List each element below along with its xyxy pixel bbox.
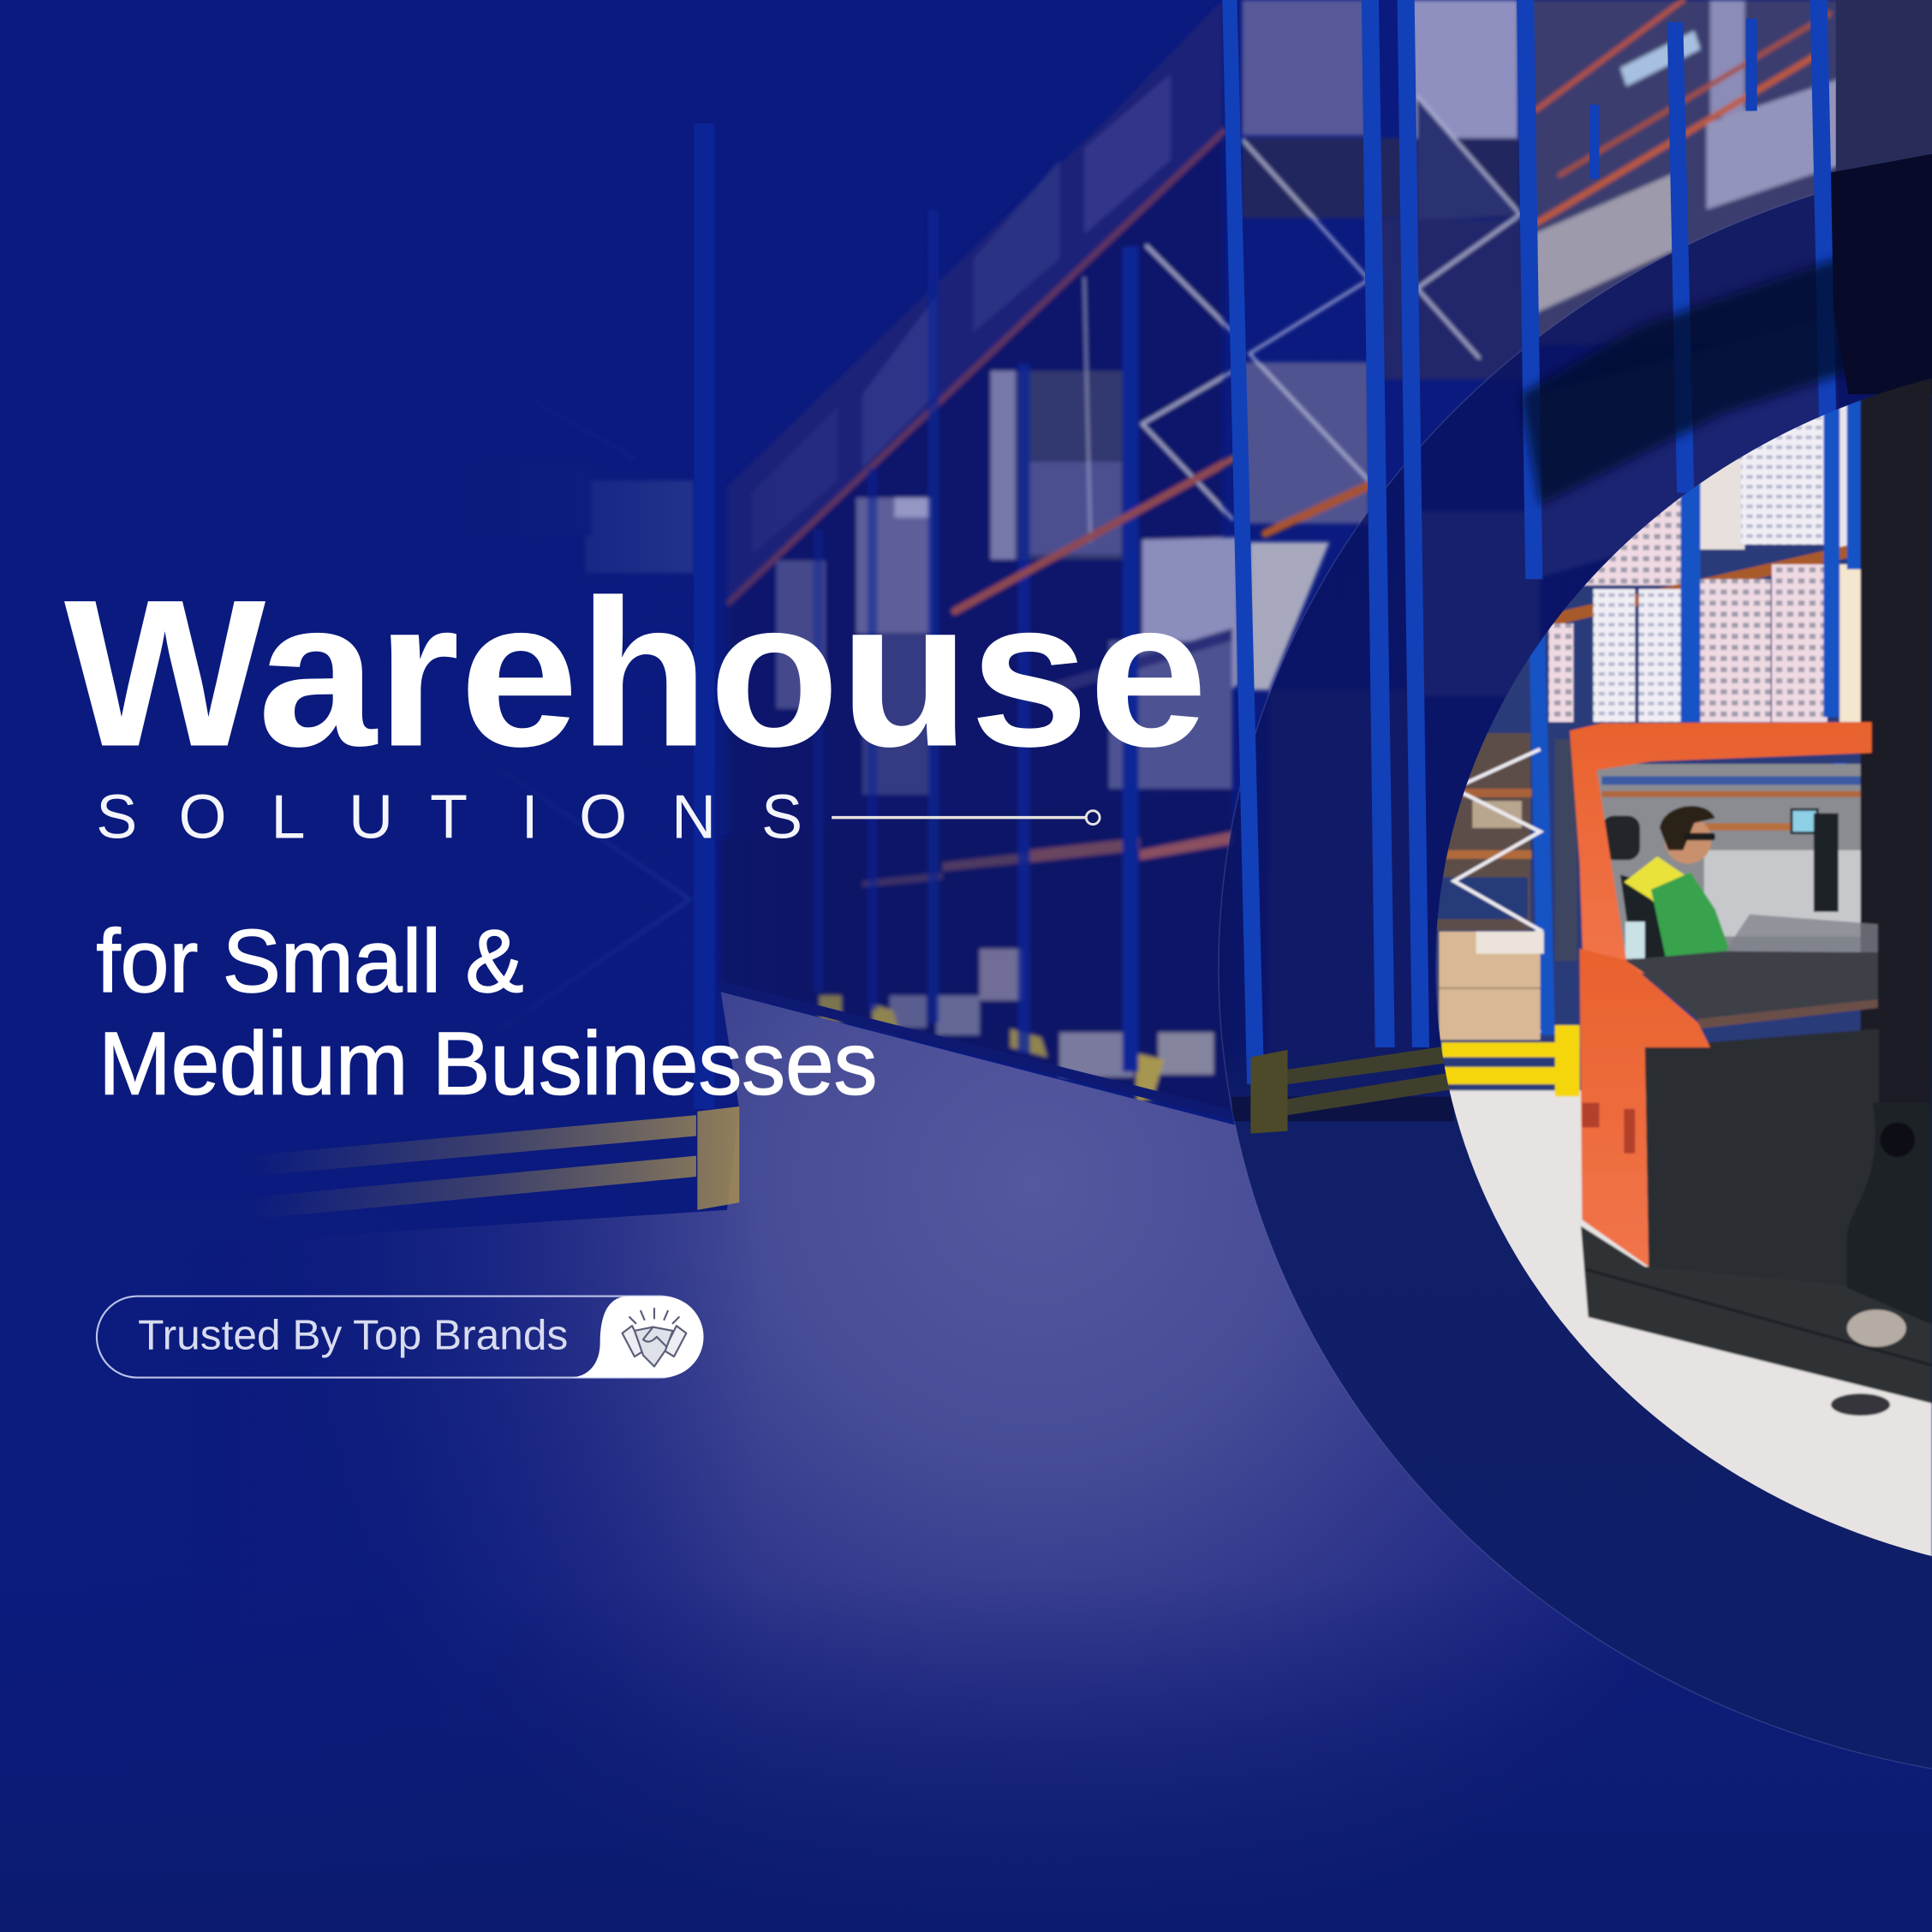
cab glass [1725, 915, 1878, 955]
blue uprights [1530, 394, 1862, 1035]
dark band shadow [1520, 253, 1854, 505]
forklift mast top silhouette [1831, 0, 1932, 394]
uprights over band [1222, 0, 1839, 1084]
aisle kerb [721, 986, 1232, 1115]
floor [1429, 1090, 1932, 1583]
yellow guard [1441, 1025, 1580, 1097]
tagline: Medium Businesses [98, 1014, 877, 1113]
subtitle: SOLUTIONS: SOLUTIONS [96, 783, 802, 851]
blue uprights mid [814, 210, 1138, 1072]
mast at right [1861, 370, 1932, 1109]
photo backdrop [1435, 456, 1862, 1092]
mast foot [1847, 1103, 1932, 1325]
pallet loads left section [776, 362, 1368, 795]
left yellow guard rail [247, 1106, 739, 1219]
tagline [96, 911, 877, 1113]
title: Warehouse: Warehouse [64, 556, 1208, 790]
badge label: Trusted By Top Brands [138, 1312, 568, 1358]
far aisle [721, 629, 1232, 1115]
chassis base [1581, 1226, 1932, 1404]
dim left upright [694, 123, 714, 1109]
upper rack wall [727, 0, 1226, 862]
bottom fade overlay [0, 1577, 1932, 1932]
lower left shelving [1429, 733, 1577, 1033]
faint left rack [468, 363, 694, 1047]
left fade overlay [0, 0, 789, 1356]
badge white tab [569, 1297, 704, 1378]
trusted badge pill [97, 1297, 704, 1378]
tagline: for Small & [96, 911, 523, 1011]
guard rail in band [1250, 1045, 1454, 1134]
rack loads inside band [1269, 314, 1836, 1121]
cab interior backdrop [1597, 764, 1878, 961]
photo circle: forklift operator [1429, 345, 1932, 1583]
display screen [1792, 809, 1817, 833]
band lower edge dark floor seam [1232, 1097, 1454, 1121]
upper pallet row [1583, 404, 1849, 587]
top right rack section [1528, 0, 1854, 345]
operator [1601, 806, 1730, 961]
orange cab frame [1570, 722, 1872, 1267]
top centre pallet stack [1242, 0, 1528, 379]
orange beams [955, 0, 1830, 611]
pill outline [97, 1297, 701, 1378]
floor left fade [0, 1202, 789, 1932]
lower pallet row [1549, 564, 1870, 722]
large dark circle overlay [1219, 152, 1932, 1783]
dark battery box [1645, 1029, 1879, 1288]
orange shelf beam [1540, 546, 1873, 623]
control console [1625, 951, 1878, 1019]
rack cross braces [1084, 96, 1520, 542]
subtitle connector line with node [832, 811, 1100, 825]
wheels [1831, 1123, 1915, 1416]
warehouse floor [0, 992, 1932, 1932]
warehouse racks tinted [468, 0, 1854, 1121]
icon: handshake [623, 1309, 686, 1367]
stacked boxes [1439, 932, 1544, 1040]
